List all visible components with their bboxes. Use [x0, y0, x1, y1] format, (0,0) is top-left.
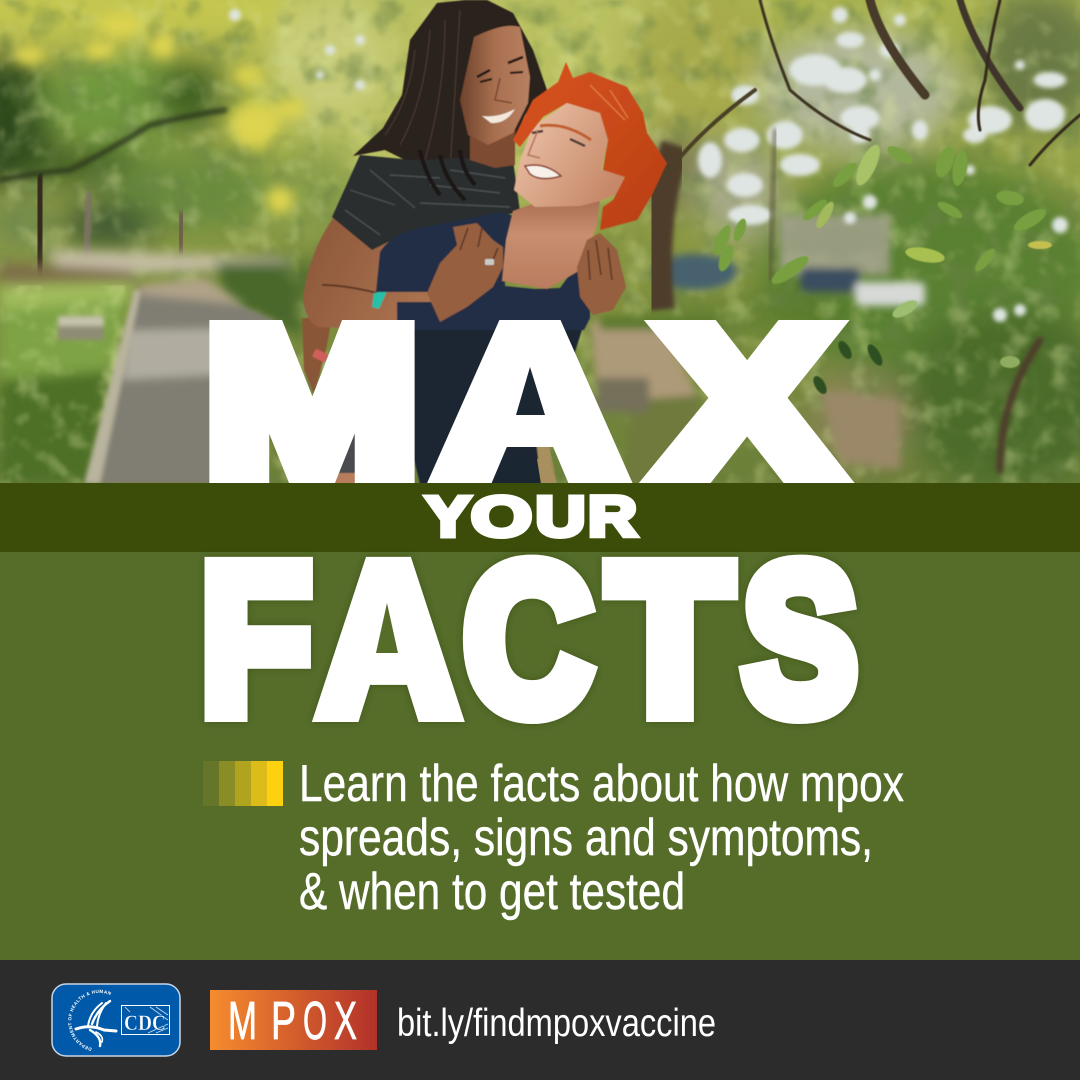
long-haired man's neck	[470, 125, 515, 168]
long-haired man's shirt	[332, 155, 520, 252]
title: MAX	[209, 320, 854, 483]
title: FACTS: S	[743, 521, 857, 757]
text block: description: spreads, signs and symptoms,	[299, 809, 873, 867]
title: MAX: A	[440, 287, 620, 516]
title: FACTS: C	[464, 521, 592, 757]
title: YOUR: U	[536, 485, 586, 549]
band: dark green strip	[0, 483, 1080, 552]
forearm and leg behind the letters	[302, 318, 332, 394]
teal wristband	[372, 291, 387, 309]
ring hand	[427, 223, 503, 322]
title: FACTS: A	[320, 521, 457, 757]
foliage texture	[0, 0, 1080, 484]
distant building and cars	[653, 215, 925, 306]
figures	[302, 0, 667, 484]
logo: HHS and CDC	[51, 983, 181, 1057]
orange-haired man's face	[514, 103, 626, 207]
badge: MPOX: O	[303, 991, 327, 1051]
orange hair	[513, 62, 667, 230]
walking path	[58, 278, 275, 484]
title: YOUR: Y	[426, 485, 470, 549]
seal ring text: DEPARTMENT OF HEALTH & HUMAN SERVICES USA	[68, 990, 112, 1051]
icon: stepped yellow gradient bar	[203, 761, 283, 806]
orange-haired man's neck	[502, 198, 600, 289]
orange-haired man's shoulder and shirt	[376, 212, 590, 330]
panel: dark footer	[0, 960, 1080, 1080]
panel: green lower section	[0, 552, 1080, 960]
text block: description	[299, 755, 904, 921]
long-haired man's arm	[303, 218, 445, 330]
title: MAX: M	[206, 287, 418, 516]
URL text: bit.ly/findmpoxvaccine	[397, 1002, 716, 1045]
park background	[0, 0, 1080, 490]
photo: couple in a park	[0, 0, 1080, 490]
lower shirt and legs	[414, 329, 582, 483]
icon: HHS eagle	[76, 1001, 116, 1046]
bush leaves on the right	[710, 142, 1052, 396]
badge: MPOX: X	[334, 991, 357, 1051]
right hand	[577, 233, 626, 315]
long-haired man's face	[460, 26, 530, 145]
hair strands over the shirt	[420, 150, 475, 200]
text block: description: & when to get tested	[299, 863, 685, 921]
sky seen through branches	[229, 7, 1068, 322]
yellow highlights	[14, 13, 306, 214]
back lawn and far path	[0, 250, 305, 483]
long-haired man's hair	[353, 0, 547, 195]
text block: description: Learn the facts about how mpox	[299, 755, 904, 813]
title: FACTS: T	[609, 521, 731, 757]
title: YOUR: O	[471, 485, 532, 549]
title: FACTS	[201, 521, 857, 757]
title: MAX: X	[662, 287, 832, 516]
ground and stone	[590, 316, 900, 484]
CDC box: CDC	[124, 1010, 166, 1035]
title: YOUR	[426, 485, 637, 549]
badge: MPOX: M	[228, 991, 257, 1051]
title: FACTS: F	[201, 521, 311, 757]
badge: MPOX	[210, 990, 377, 1051]
tree trunks and branches	[0, 0, 1080, 470]
title: YOUR: R	[588, 485, 637, 549]
badge: MPOX: P	[271, 991, 296, 1051]
